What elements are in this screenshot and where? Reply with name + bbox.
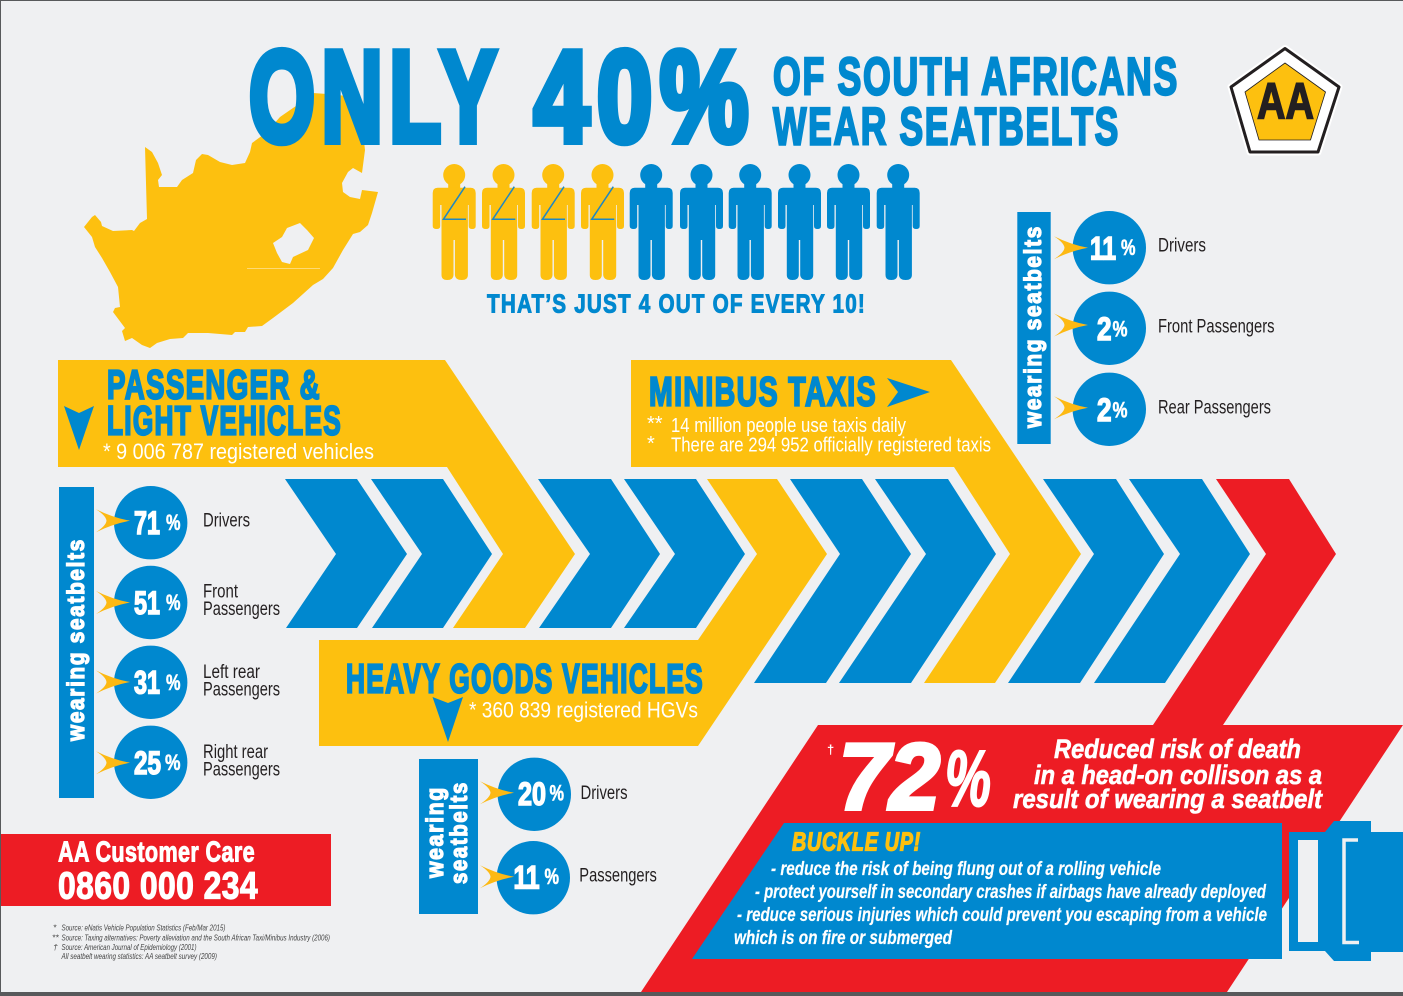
statistic: 72 percent: % xyxy=(945,734,991,823)
icon: down arrow xyxy=(64,406,94,450)
heading: minibus taxis: MINIBUS TAXIS xyxy=(649,368,877,414)
panel: red arrow and statistic background xyxy=(641,479,1403,992)
title: of South Africans wear seatbelts: OF SOUTH AFRICANS xyxy=(773,48,1179,106)
title: of South Africans wear seatbelts xyxy=(773,48,1179,156)
minibus notes xyxy=(647,413,991,456)
heading: passenger and light vehicles: LIGHT VEHICLES xyxy=(107,398,342,444)
footnotes: sources: Source: eNatis Vehicle Population Statistics (Feb/Mar 2015) xyxy=(62,923,226,933)
stat: passengers 11% xyxy=(480,841,657,914)
footnotes: sources: All seatbelt wearing statistics: AA seatbelt survey (2009) xyxy=(61,951,217,961)
panel: heavy goods vehicles xyxy=(319,479,827,746)
statistic: 72 percent xyxy=(827,724,991,829)
footnotes: sources: ** xyxy=(52,932,59,942)
icon: seatbelt buckle xyxy=(1289,821,1403,961)
stat: left rear passengers 31%: 31 xyxy=(134,664,160,700)
stat: drivers 20% xyxy=(480,758,628,831)
stat: right rear passengers 25%: % xyxy=(165,750,180,775)
footnotes: sources: Source: American Journal of Epidemiology (2001) xyxy=(62,942,197,952)
stats group: passenger and light vehicles xyxy=(59,486,280,799)
stat: drivers 11%: Drivers xyxy=(1158,236,1206,257)
title: of South Africans wear seatbelts: WEAR SEATBELTS xyxy=(773,98,1120,156)
title: only 40%: 40% xyxy=(534,25,756,169)
stat: rear passengers 2%: 2 xyxy=(1097,392,1112,428)
stat: passengers 11%: Passengers xyxy=(579,866,657,887)
registered vehicles note: * 9 006 787 registered vehicles xyxy=(103,439,374,464)
bar label: wearing seatbelts xyxy=(59,487,94,798)
stats group: minibus taxis xyxy=(1017,211,1274,446)
bar label: wearing seatbelts xyxy=(419,759,478,914)
stat: rear passengers 2%: % xyxy=(1112,398,1128,422)
text: reduced risk of death: result of wearing a seatbelt xyxy=(1013,784,1323,814)
stat: passengers 11%: % xyxy=(544,864,559,889)
heading: passenger and light vehicles: PASSENGER & xyxy=(107,362,321,408)
stat: drivers 71%: Drivers xyxy=(203,511,250,532)
minibus notes: ** xyxy=(647,413,663,435)
statistic: 72 percent: † xyxy=(827,742,834,757)
icon: AA logo: AA xyxy=(1257,72,1314,130)
stat: rear passengers 2%: Rear Passengers xyxy=(1158,397,1271,418)
map of South Africa xyxy=(84,93,378,348)
minibus notes: * xyxy=(647,433,655,455)
stat: drivers 71% xyxy=(96,486,250,559)
stat: right rear passengers 25%: Right rear xyxy=(203,742,269,763)
pictogram: 4 of 10 people belted xyxy=(433,164,920,280)
footnotes: sources: Source: Taxing alternatives: Poverty alleviation and the South African Taxi/Minibus Industry (2006) xyxy=(62,933,330,943)
bar label: wearing seatbelts: seatbelts xyxy=(446,781,473,884)
text: reduced risk of death xyxy=(1013,734,1323,814)
stat: right rear passengers 25%: 25 xyxy=(134,745,161,781)
stat: left rear passengers 31% xyxy=(96,646,280,719)
stat: front passengers 2%: % xyxy=(1112,317,1128,342)
stat: drivers 71%: % xyxy=(166,510,180,535)
icon: down arrow xyxy=(432,697,463,742)
stat: front passengers 51%: Passengers xyxy=(203,599,280,620)
statistic: 72 percent: 72 xyxy=(839,724,940,829)
stats group: heavy goods vehicles xyxy=(419,758,657,914)
stat: right rear passengers 25% xyxy=(96,726,280,799)
stat: drivers 20%: % xyxy=(550,781,564,806)
minibus notes: 14 million people use taxis daily xyxy=(671,415,906,437)
stat: left rear passengers 31%: Left rear xyxy=(203,662,261,683)
heading: buckle up: BUCKLE UP! xyxy=(792,826,921,856)
bar label: wearing seatbelts: wearing xyxy=(422,786,449,879)
panel: passenger and light vehicles xyxy=(58,360,575,628)
heading: passenger and light vehicles xyxy=(107,362,342,444)
stat: drivers 20%: 20 xyxy=(518,776,546,812)
stat: front passengers 51%: Front xyxy=(203,582,239,603)
stat: right rear passengers 25%: Passengers xyxy=(203,760,280,780)
callout: AA customer care: 0860 000 234 xyxy=(58,866,258,908)
stat: front passengers 2%: 2 xyxy=(1097,311,1112,347)
stat: drivers 11%: % xyxy=(1121,235,1136,260)
panel: buckle up xyxy=(692,823,1282,959)
stat: front passengers 51%: 51 xyxy=(134,585,160,621)
icon: right arrow xyxy=(887,378,930,407)
stat: drivers 71%: 71 xyxy=(134,505,160,541)
stat: passengers 11%: 11 xyxy=(514,860,540,896)
buckle up bullet list: - reduce serious injuries which could prevent you escaping from a vehicle xyxy=(737,904,1267,926)
footnotes: sources xyxy=(52,922,330,961)
callout: AA customer care xyxy=(1,834,331,908)
heading: heavy goods vehicles: HEAVY GOODS VEHICLES xyxy=(346,656,704,702)
buckle up bullet list xyxy=(734,858,1267,949)
minibus notes: There are 294 952 officially registered taxis xyxy=(671,434,991,456)
footnotes: sources: * xyxy=(53,922,57,932)
title: only 40%: ONLY xyxy=(249,25,503,169)
bar label: wearing seatbelts: wearing seatbelts xyxy=(63,538,90,742)
stat: rear passengers 2% xyxy=(1054,373,1271,446)
stat: left rear passengers 31%: Passengers xyxy=(203,680,280,700)
heading: that's just 4 out of every 10: THAT’S JUST 4 OUT OF EVERY 10! xyxy=(487,288,866,318)
chevrons: blue row two xyxy=(754,479,1250,683)
stat: drivers 11% xyxy=(1054,211,1206,284)
stat: drivers 11%: 11 xyxy=(1090,230,1116,266)
footnotes: sources: † xyxy=(53,942,58,952)
stat: front passengers 2%: Front Passengers xyxy=(1158,317,1274,338)
text: reduced risk of death: in a head-on collison as a xyxy=(1034,760,1322,790)
buckle up bullet list: which is on fire or submerged xyxy=(734,927,953,949)
callout: AA customer care: AA Customer Care xyxy=(58,836,255,868)
buckle up bullet list: - reduce the risk of being flung out of a rolling vehicle xyxy=(771,858,1161,880)
panel: minibus taxis xyxy=(631,360,1081,683)
icon: AA logo xyxy=(1231,48,1339,152)
registered HGVs note: * 360 839 registered HGVs xyxy=(469,698,698,722)
stat: front passengers 51%: % xyxy=(166,590,180,615)
stat: left rear passengers 31%: % xyxy=(166,670,180,695)
text: reduced risk of death: Reduced risk of death xyxy=(1054,734,1301,764)
bar label: wearing seatbelts: wearing seatbelts xyxy=(1020,225,1047,429)
stat: front passengers 51% xyxy=(96,566,280,639)
stat: drivers 20%: Drivers xyxy=(580,783,628,804)
chevrons: blue row one xyxy=(285,479,745,628)
stat: front passengers 2% xyxy=(1054,292,1274,365)
